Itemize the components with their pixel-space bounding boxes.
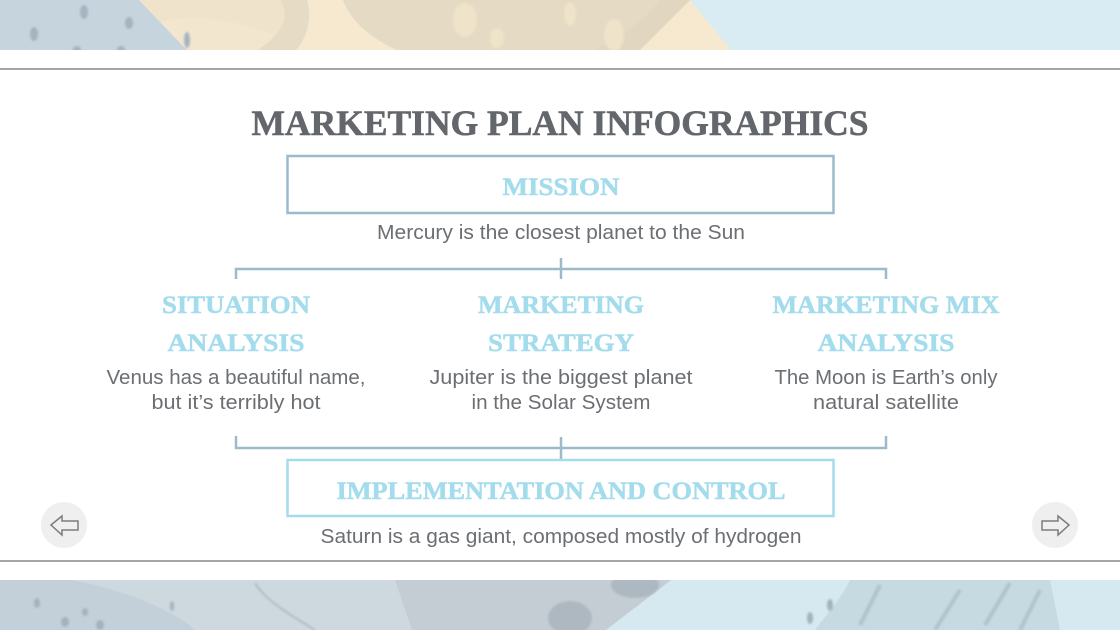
top watercolor band xyxy=(0,0,1120,54)
column: situation analysis: Venus has a beautiful name, xyxy=(106,367,366,389)
column: marketing strategy: in the Solar System xyxy=(472,392,650,414)
implementation box xyxy=(288,460,834,516)
column: marketing mix analysis: natural satellite xyxy=(813,392,959,414)
column: marketing mix analysis: MARKETING MIX xyxy=(772,292,1000,319)
column: marketing strategy: MARKETING xyxy=(478,292,644,319)
mission box xyxy=(288,156,834,213)
implementation box: IMPLEMENTATION AND CONTROL xyxy=(336,478,786,505)
mission box: MISSION xyxy=(502,174,620,201)
frame lines xyxy=(0,68,1120,562)
column: marketing mix analysis: ANALYSIS xyxy=(818,330,954,357)
column: marketing strategy: Jupiter is the biggest planet xyxy=(430,367,693,389)
mission text: Mercury is the closest planet to the Sun xyxy=(377,222,745,244)
top connector xyxy=(236,258,886,279)
title: MARKETING PLAN INFOGRAPHICS xyxy=(252,103,868,143)
bottom watercolor band xyxy=(0,580,1120,630)
icon: next arrow xyxy=(1032,502,1078,548)
column: marketing strategy: STRATEGY xyxy=(488,330,634,357)
column: situation analysis: ANALYSIS xyxy=(168,330,304,357)
icon: previous arrow xyxy=(41,502,87,548)
column: marketing mix analysis xyxy=(772,292,1000,414)
bottom connector xyxy=(236,436,886,459)
implementation text: Saturn is a gas giant, composed mostly of hydrogen xyxy=(320,526,802,548)
column: situation analysis: SITUATION xyxy=(162,292,310,319)
column: situation analysis xyxy=(106,292,366,414)
column: marketing mix analysis: The Moon is Earth’s only xyxy=(774,367,998,389)
column: situation analysis: but it’s terribly hot xyxy=(152,392,321,414)
column: marketing strategy xyxy=(430,292,693,414)
